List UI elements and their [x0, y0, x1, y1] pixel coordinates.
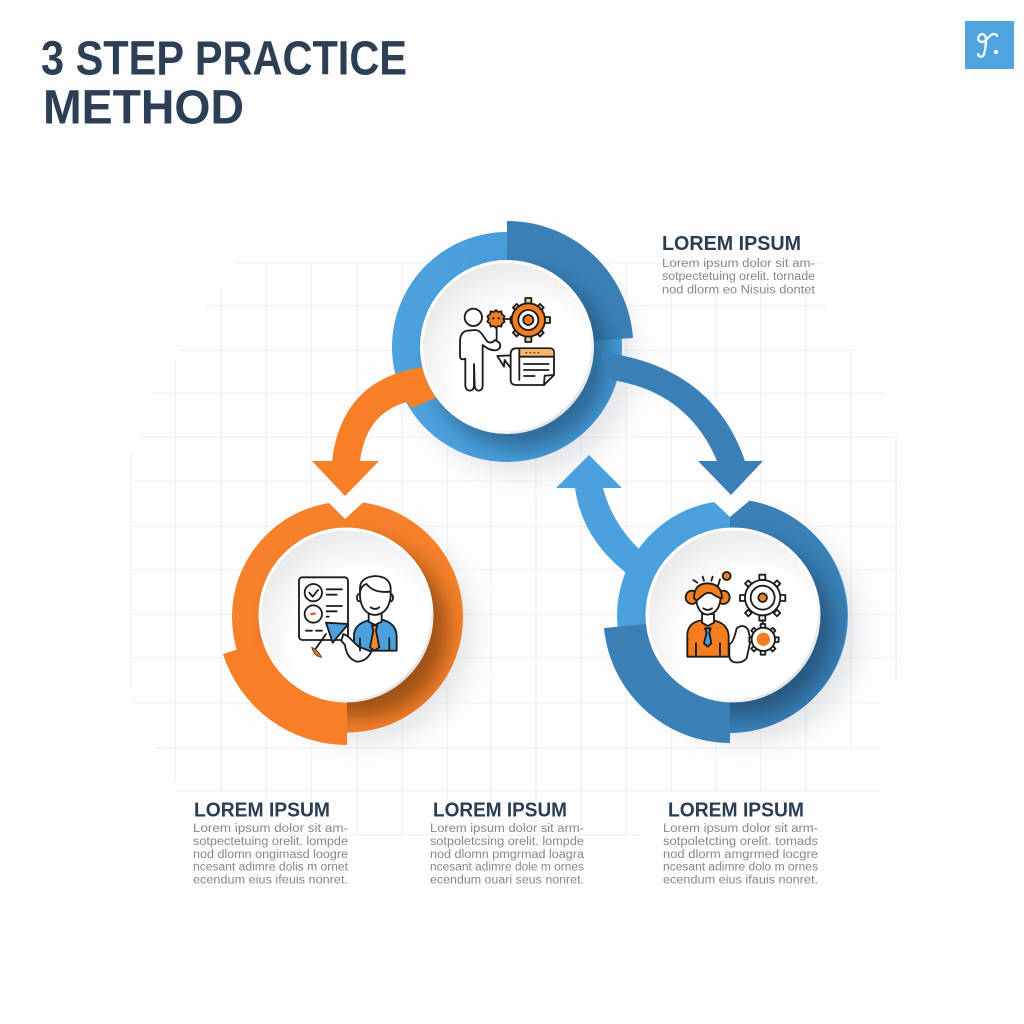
icon: woman with gears: [686, 572, 785, 663]
text block: middle column: ncesant adimre dole m ornes: [430, 862, 584, 874]
panel: step 1 disc: [420, 260, 594, 434]
arrow: right to top: [556, 455, 665, 590]
ring: step 2 left: [223, 488, 474, 745]
icon: man with checklist: [299, 576, 397, 662]
text block: left column: [193, 800, 349, 886]
text block: middle column: nod dlomn pmgrmad loagra: [430, 849, 585, 861]
panel: step 2 disc: [258, 528, 434, 702]
text block: left column: Lorem ipsum dolor sit am-: [193, 823, 348, 835]
arrow: top to right: [600, 352, 763, 495]
text block: left column: ecendum eius ifeuis nonret.: [193, 874, 348, 886]
text block: right column: ncesant adimre dolo m ornes: [663, 862, 818, 874]
text block: middle column: sotpoletcsing orelit. lompde: [430, 836, 584, 848]
text block: top right: LOREM IPSUM: [662, 233, 801, 255]
text block: right column: nod dlorm amgrmed locgre: [663, 849, 818, 861]
text block: top right: [662, 233, 816, 296]
text block: right column: ecendum eius ifauis nonret.: [663, 874, 818, 886]
text block: middle column: ecendum ouari seus nonret.: [430, 874, 584, 886]
text block: right column: [663, 800, 818, 886]
ring: step 3 right: [604, 488, 859, 743]
arrow: top to left: [312, 367, 440, 496]
title: METHOD: [43, 82, 244, 134]
title: [41, 32, 407, 134]
text block: left column: nod dlomn ongimasd loogre: [193, 849, 348, 861]
title: 3 STEP PRACTICE: [41, 32, 407, 86]
text block: middle column: [430, 800, 585, 886]
text block: middle column: LOREM IPSUM: [433, 800, 567, 822]
icon: person with gears and note: [460, 298, 554, 391]
text block: top right: Lorem ipsum dolor sit am-: [662, 258, 815, 270]
text block: middle column: Lorem ipsum dolor sit arm-: [430, 823, 584, 835]
background grid: [131, 263, 897, 835]
text block: top right: nod dlorm eo Nisuis dontet: [662, 284, 816, 296]
panel: step 3 disc: [646, 528, 820, 702]
text block: left column: ncesant adimre dolis m ornet: [193, 862, 349, 874]
text block: left column: LOREM IPSUM: [194, 800, 330, 822]
ring: step 1 top: [392, 221, 634, 474]
text block: right column: sotpoletcting orelit. tomads: [663, 836, 818, 848]
logo badge: [965, 21, 1014, 69]
text block: right column: Lorem ipsum dolor sit arm-: [663, 823, 818, 835]
text block: left column: sotpectetuing orelit. lompde: [193, 836, 348, 848]
text block: top right: sotpectetuing orelit. tornade: [662, 271, 815, 283]
text block: right column: LOREM IPSUM: [668, 800, 804, 822]
